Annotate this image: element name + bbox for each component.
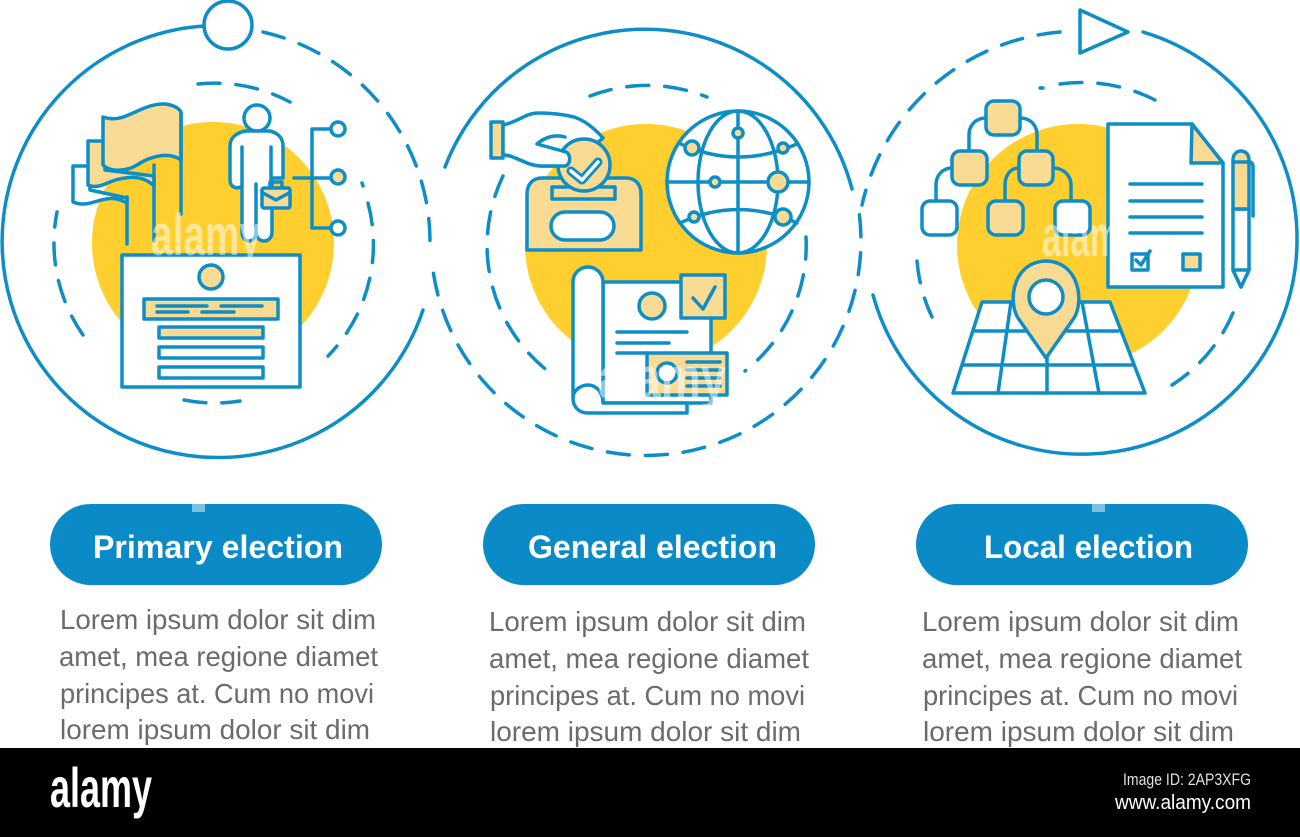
watermark: local: alam bbox=[1042, 204, 1120, 269]
text block: primary: lorem ipsum dolor sit dim bbox=[60, 714, 370, 745]
text block: local: Lorem ipsum dolor sit dim bbox=[922, 606, 1239, 637]
yellow backdrop circle: primary bbox=[92, 122, 334, 364]
text block: local bbox=[922, 606, 1242, 747]
title pill: local election bbox=[916, 504, 1248, 585]
icon: map grid bbox=[953, 302, 1145, 393]
yellow backdrop circle: general bbox=[525, 124, 767, 366]
icon: flags bbox=[73, 104, 181, 244]
text block: primary bbox=[59, 604, 378, 745]
progress ring: general bbox=[432, 29, 861, 455]
watermark: primary: alamy bbox=[151, 203, 261, 268]
footer bar: stock image credit bbox=[0, 748, 1300, 837]
title pill: general election bbox=[483, 504, 815, 585]
icon: scroll document bbox=[573, 267, 727, 413]
text block: general: Lorem ipsum dolor sit dim bbox=[489, 606, 806, 637]
icon: candidate with briefcase bbox=[230, 105, 290, 241]
progress ring: primary bbox=[2, 1, 430, 458]
yellow backdrop circle: local bbox=[957, 124, 1199, 366]
website: www.alamy.com bbox=[1114, 792, 1251, 814]
icon: pen bbox=[1233, 151, 1253, 287]
text block: local: principes at. Cum no movi bbox=[923, 680, 1238, 711]
icon: ballot board bbox=[122, 255, 300, 387]
progress ring: local bbox=[862, 10, 1297, 454]
icon: ballot box bbox=[527, 178, 641, 250]
panel: general election bbox=[432, 29, 861, 747]
icon: network branches bbox=[294, 122, 345, 235]
text block: primary: amet, mea regione diamet bbox=[59, 641, 378, 672]
title pill: general election: General election bbox=[528, 529, 777, 565]
title pill: local election: Local election bbox=[984, 529, 1193, 565]
icon: location pin bbox=[1013, 261, 1079, 358]
text block: general: principes at. Cum no movi bbox=[490, 680, 805, 711]
image id: Image ID: 2AP3XFG bbox=[1123, 770, 1251, 789]
logo: alamy: alamy bbox=[50, 756, 152, 819]
title pill: primary election bbox=[50, 504, 382, 585]
text block: primary: principes at. Cum no movi bbox=[60, 678, 374, 709]
text block: local: lorem ipsum dolor sit dim bbox=[923, 716, 1234, 747]
text block: local: amet, mea regione diamet bbox=[922, 643, 1242, 674]
icon: globe bbox=[667, 111, 809, 253]
title pill: primary election: Primary election bbox=[93, 529, 343, 565]
text block: general bbox=[489, 606, 809, 747]
panel: local election bbox=[862, 10, 1297, 747]
panel: primary election bbox=[2, 1, 430, 745]
watermark: general: alamy bbox=[598, 346, 726, 411]
icon: hierarchy tree bbox=[922, 101, 1090, 235]
text block: general: amet, mea regione diamet bbox=[489, 643, 809, 674]
icon: hand casting vote bbox=[491, 113, 610, 191]
text block: primary: Lorem ipsum dolor sit dim bbox=[60, 604, 376, 635]
text block: general: lorem ipsum dolor sit dim bbox=[490, 716, 801, 747]
icon: checklist document bbox=[1108, 124, 1223, 287]
